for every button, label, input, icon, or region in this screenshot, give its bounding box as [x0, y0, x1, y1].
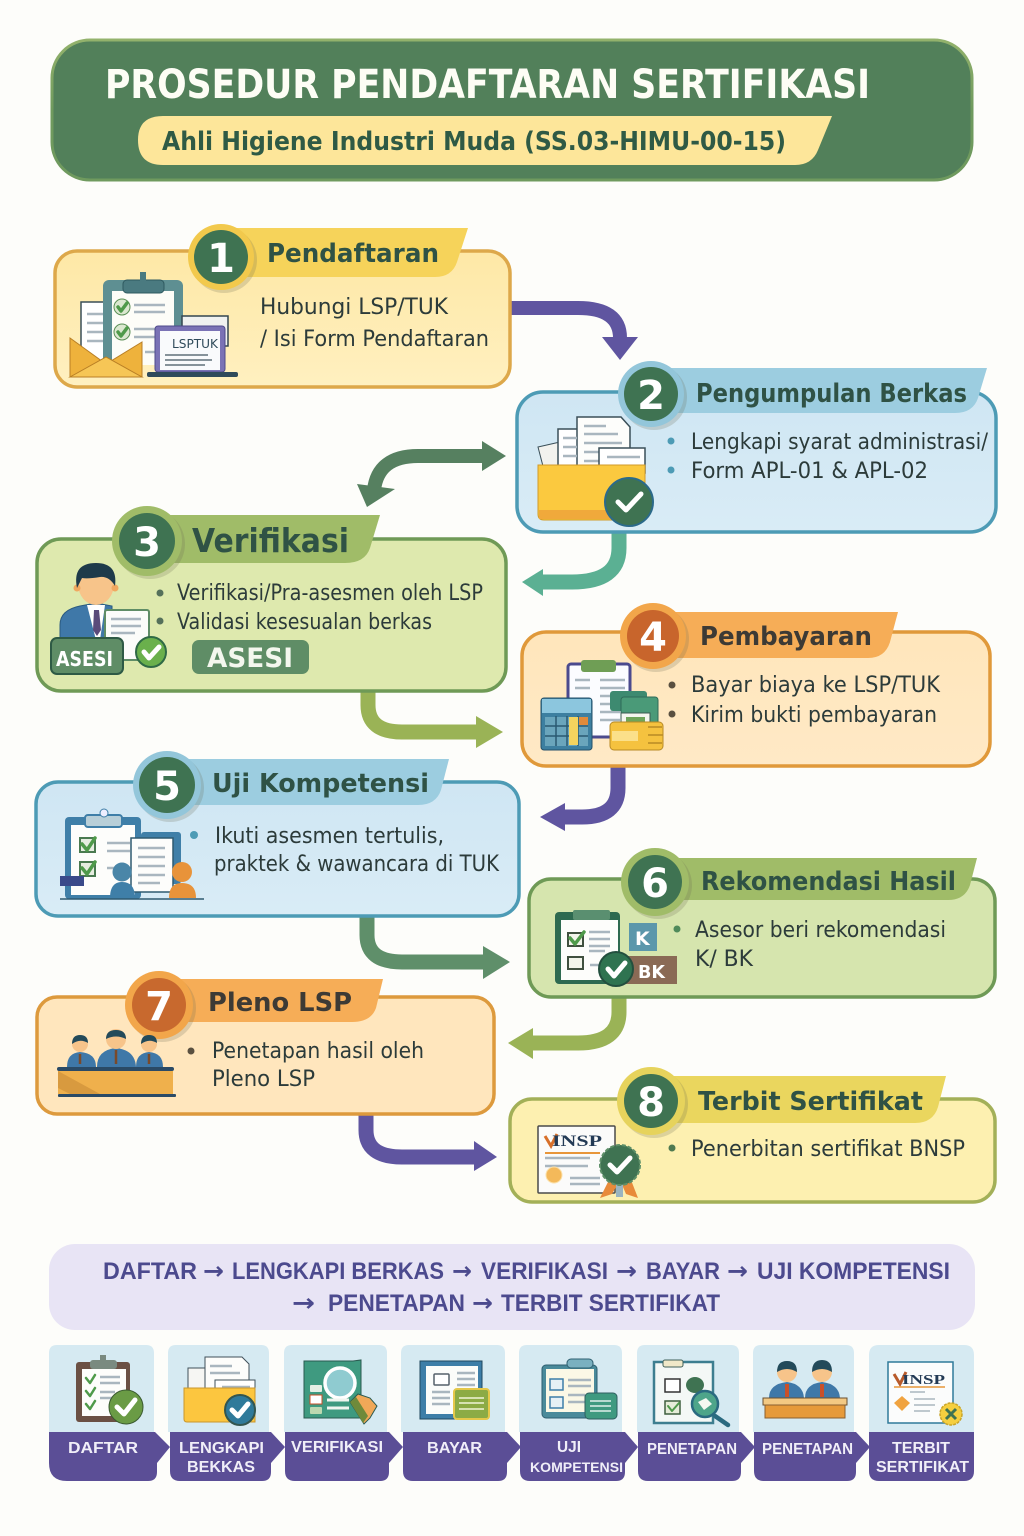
icon: calculator, invoice and wallet: [541, 660, 663, 750]
icon: clipboard with magnifier: [654, 1360, 728, 1425]
panel: step 3 Verifikasi: [37, 506, 506, 691]
tile: VERIFIKASI: VERIFIKASI: [291, 1439, 383, 1456]
badge: ASESI: [192, 640, 309, 674]
tile: TERBIT SERTIFIKAT: SERTIFIKAT: [876, 1459, 969, 1476]
step 1 text: [260, 295, 489, 352]
step 4 text: Bayar biaya ke LSP/TUK: [691, 673, 941, 698]
tile: TERBIT SERTIFIKAT: [869, 1345, 974, 1481]
arrow: step 4 to step 5: [540, 766, 618, 831]
tile: UJI KOMPETENSI: [519, 1345, 638, 1481]
summary band: →: [616, 1257, 637, 1285]
icon: forms, envelope and laptop: [70, 272, 238, 377]
step 4 text: [668, 673, 941, 728]
title banner: [52, 40, 972, 180]
tile: PENETAPAN (hasil): PENETAPAN: [647, 1441, 737, 1458]
tile: BAYAR: BAYAR: [427, 1440, 482, 1457]
subtitle ribbon: [138, 116, 832, 165]
icon: certificate with seal: INSP: [902, 1373, 946, 1388]
summary band: TERBIT SERTIFIKAT: [501, 1290, 720, 1317]
step 6 text: [674, 918, 946, 972]
step 1 text: Hubungi LSP/TUK: [260, 295, 449, 320]
panel: step 2 Pengumpulan Berkas: Pengumpulan Berkas: [696, 379, 967, 409]
icon: certificate with rosette: [538, 1126, 640, 1198]
panel: step 2 Pengumpulan Berkas: 2: [637, 373, 665, 419]
icon: clipboard with K / BK: K: [635, 928, 651, 950]
tile: LENGKAPI BEKKAS: BEKKAS: [187, 1459, 255, 1476]
tile: UJI KOMPETENSI: UJI: [557, 1439, 581, 1456]
panel: step 5 Uji Kompetensi: Uji Kompetensi: [212, 769, 429, 799]
summary band: →: [472, 1289, 493, 1317]
icon: magnifier over form with stamp: [304, 1360, 377, 1424]
panel: step 5 Uji Kompetensi: 5: [153, 764, 181, 810]
icon: assessee with document: ASESI: [56, 647, 113, 671]
panel: step 1 Pendaftaran: 1: [207, 236, 235, 282]
panel: step 6 Rekomendasi Hasil: [529, 848, 995, 997]
summary band: UJI KOMPETENSI: [757, 1258, 950, 1285]
icon: assessee with document: [51, 563, 166, 674]
summary band: LENGKAPI BERKAS: [232, 1258, 444, 1285]
icon: test papers and participants: [60, 809, 204, 899]
step 6 text: K/ BK: [695, 947, 754, 972]
step 6 text: Asesor beri rekomendasi: [695, 918, 946, 943]
step 8 text: Penerbitan sertifikat BNSP: [691, 1137, 965, 1162]
summary band: PENETAPAN: [328, 1290, 465, 1317]
step 3 text: [156, 581, 483, 635]
panel: step 2 Pengumpulan Berkas: [517, 361, 996, 532]
icon: clipboard checklist: [76, 1355, 143, 1424]
step 2 text: Form APL-01 & APL-02: [691, 459, 928, 484]
tile: PENETAPAN (pleno): PENETAPAN: [762, 1441, 853, 1458]
summary band: VERIFIKASI: [481, 1258, 608, 1285]
tile: TERBIT SERTIFIKAT: TERBIT: [892, 1440, 950, 1457]
icon: exam clipboard: [542, 1359, 617, 1419]
icon: forms, envelope and laptop: LSPTUK: [172, 337, 219, 351]
summary band: BAYAR: [646, 1258, 720, 1285]
icon: plenary panel at desk: [57, 1029, 176, 1097]
step 5 text: [190, 824, 500, 877]
step 3 text: Validasi kesesualan berkas: [177, 610, 432, 635]
arrow: step 3 to step 4: [368, 692, 503, 748]
step 4 text: Kirim bukti pembayaran: [691, 703, 937, 728]
tile: PENETAPAN (pleno): [753, 1345, 870, 1481]
arrow: step 7 to step 8: [366, 1114, 497, 1171]
icon: clipboard with K / BK: BK: [638, 962, 666, 983]
arrow: step 2 to step 3 double-headed: [357, 441, 506, 507]
arrow: step 6 to step 7: [508, 997, 619, 1059]
arrow: step 1 to step 2: [511, 308, 638, 360]
icon: invoice and card: [420, 1361, 489, 1419]
step 7 text: [188, 1039, 424, 1092]
step 1 text: / Isi Form Pendaftaran: [260, 327, 489, 352]
tile: VERIFIKASI: [284, 1345, 403, 1481]
panel: step 3 Verifikasi: 3: [133, 520, 161, 566]
panel: step 4 Pembayaran: [522, 603, 990, 766]
title: PROSEDUR PENDAFTARAN SERTIFIKASI: [105, 62, 870, 108]
summary band: →: [452, 1257, 472, 1285]
tile: LENGKAPI BEKKAS: [168, 1345, 285, 1481]
panel: step 6 Rekomendasi Hasil: Rekomendasi Hasil: [701, 867, 956, 897]
step 5 text: praktek & wawancara di TUK: [214, 852, 500, 877]
panel: step 6 Rekomendasi Hasil: 6: [641, 861, 669, 907]
step 3 text: Verifikasi/Pra-asesmen oleh LSP: [177, 581, 483, 606]
arrow: step 5 to step 6: [367, 916, 510, 979]
tile: DAFTAR: [49, 1345, 170, 1481]
icon: clipboard with K / BK: [555, 910, 677, 986]
tile: BAYAR: [401, 1345, 521, 1481]
panel: step 5 Uji Kompetensi: [36, 751, 519, 916]
panel: step 4 Pembayaran: Pembayaran: [700, 622, 872, 652]
panel: step 4 Pembayaran: 4: [639, 615, 667, 661]
tile: DAFTAR: DAFTAR: [68, 1440, 138, 1457]
step 2 text: Lengkapi syarat administrasi/: [691, 430, 989, 455]
tile: LENGKAPI BEKKAS: LENGKAPI: [179, 1440, 264, 1457]
icon: folder with papers: [538, 417, 653, 526]
icon: two panelists at desk: [763, 1360, 847, 1418]
panel: step 1 Pendaftaran: [55, 224, 510, 387]
panel: step 7 Pleno LSP: [37, 971, 494, 1114]
step 2 text: [668, 430, 989, 484]
panel: step 8 Terbit Sertifikat: [510, 1067, 995, 1202]
icon: folder with check: [184, 1357, 255, 1425]
panel: step 7 Pleno LSP: Pleno LSP: [208, 988, 352, 1018]
panel: step 7 Pleno LSP: 7: [145, 984, 173, 1030]
arrow: step 2 down to step 3: [522, 532, 619, 596]
summary band: →: [203, 1257, 224, 1285]
icon: certificate with rosette: INSP: [552, 1133, 602, 1150]
panel: step 3 Verifikasi: Verifikasi: [192, 521, 349, 560]
panel: step 1 Pendaftaran: Pendaftaran: [267, 239, 439, 269]
subtitle ribbon: Ahli Higiene Industri Muda (SS.03-HIMU-00-15): [162, 127, 786, 157]
tile: PENETAPAN (hasil): [637, 1345, 755, 1481]
summary band: →: [727, 1257, 748, 1285]
tile: UJI KOMPETENSI: KOMPETENSI: [530, 1459, 623, 1475]
summary band: [49, 1244, 975, 1330]
summary band: →: [292, 1289, 315, 1317]
badge: ASESI: ASESI: [207, 643, 293, 674]
step 5 text: Ikuti asesmen tertulis,: [215, 824, 444, 849]
panel: step 8 Terbit Sertifikat: 8: [637, 1080, 665, 1126]
summary band: DAFTAR: [103, 1258, 197, 1285]
panel: step 8 Terbit Sertifikat: Terbit Sertifikat: [698, 1087, 923, 1117]
step 7 text: Penetapan hasil oleh: [212, 1039, 424, 1064]
step 7 text: Pleno LSP: [212, 1067, 315, 1092]
